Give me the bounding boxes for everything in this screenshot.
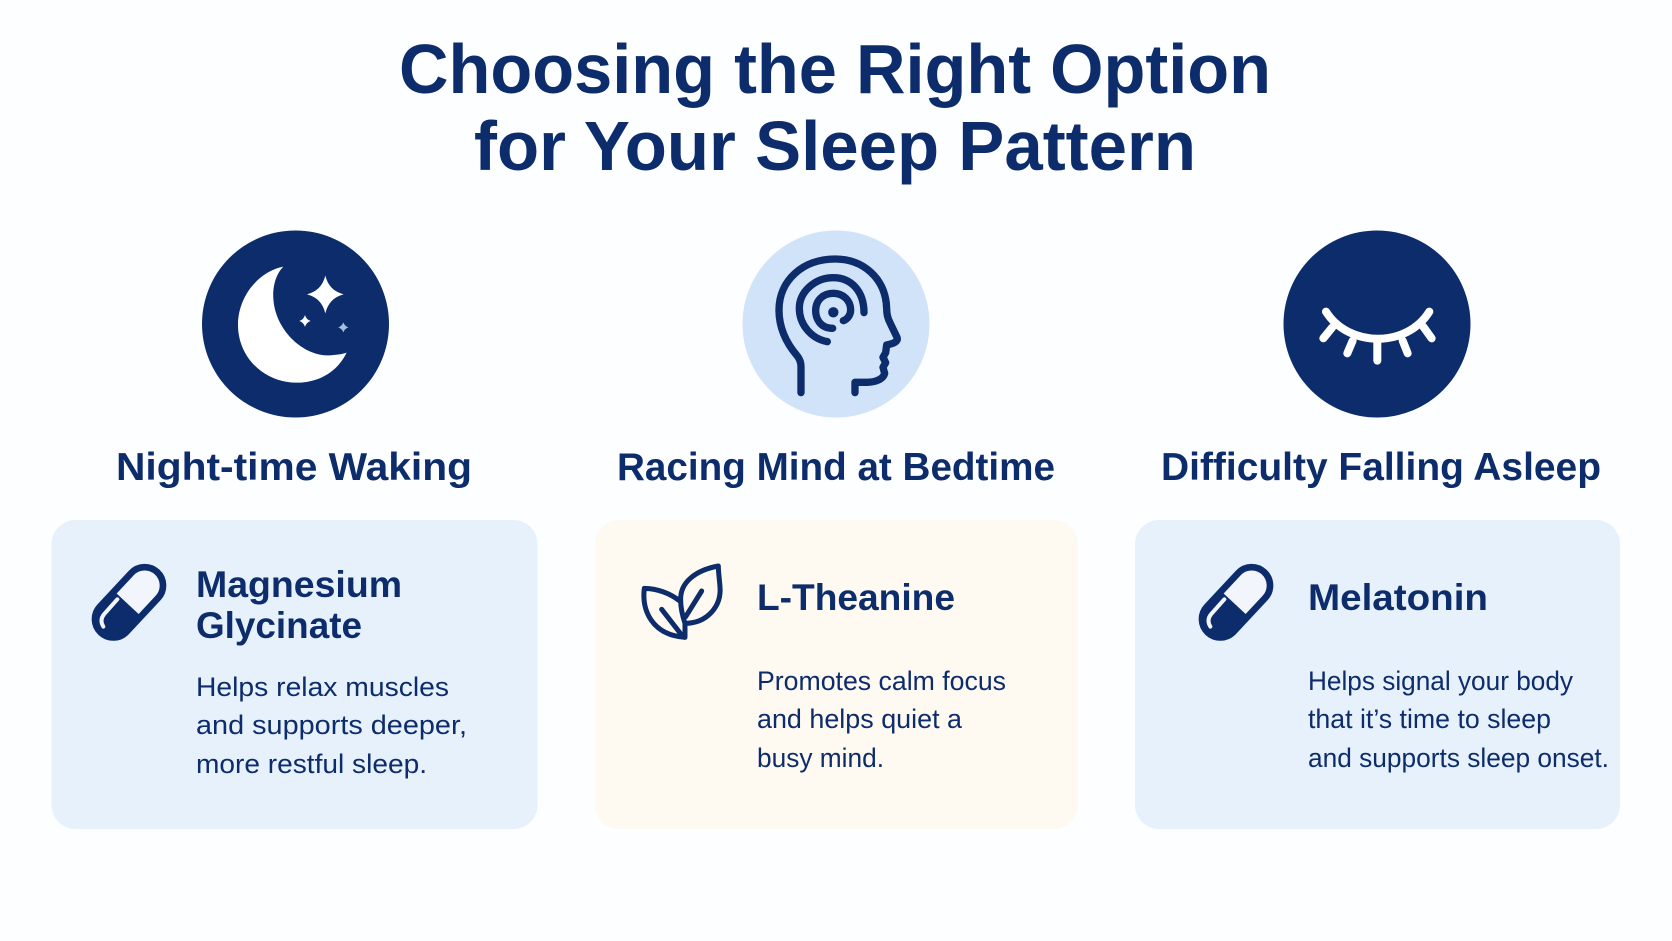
- panel: melatonin: [1135, 520, 1620, 829]
- icon: head with spiral: [742, 230, 930, 418]
- description: and helps quiet a: [757, 704, 963, 734]
- description: [1308, 666, 1609, 773]
- panel: magnesium glycinate: [52, 520, 538, 829]
- description: and supports sleep onset.: [1308, 743, 1609, 773]
- title: [399, 30, 1271, 185]
- icon: moon and stars: [202, 230, 389, 418]
- supplement name: Melatonin: [1308, 577, 1488, 618]
- heading: racing mind: Racing Mind at Bedtime: [617, 446, 1055, 489]
- description: and supports deeper,: [196, 710, 467, 740]
- description: more restful sleep.: [196, 749, 427, 779]
- heading: difficulty falling asleep: Difficulty Falling Asleep: [1161, 446, 1601, 489]
- description: [757, 666, 1006, 773]
- icon: capsule: [1192, 558, 1279, 647]
- description: Promotes calm focus: [757, 666, 1006, 696]
- icon: capsule: [85, 558, 172, 647]
- supplement name: [196, 564, 402, 646]
- icon: leaves: [644, 566, 720, 637]
- title: Choosing the Right Option: [399, 30, 1271, 108]
- description: Helps signal your body: [1308, 666, 1573, 696]
- supplement name: Magnesium: [196, 564, 402, 605]
- heading: night-time waking: Night-time Waking: [116, 446, 472, 489]
- supplement name: L-Theanine: [757, 577, 955, 618]
- icon: closed eye: [1284, 230, 1470, 418]
- description: busy mind.: [757, 743, 884, 773]
- title: for Your Sleep Pattern: [474, 107, 1196, 185]
- panel: l-theanine: [595, 520, 1078, 829]
- description: that it’s time to sleep: [1308, 704, 1551, 734]
- supplement name: Glycinate: [196, 605, 362, 646]
- description: [196, 672, 467, 779]
- description: Helps relax muscles: [196, 672, 449, 702]
